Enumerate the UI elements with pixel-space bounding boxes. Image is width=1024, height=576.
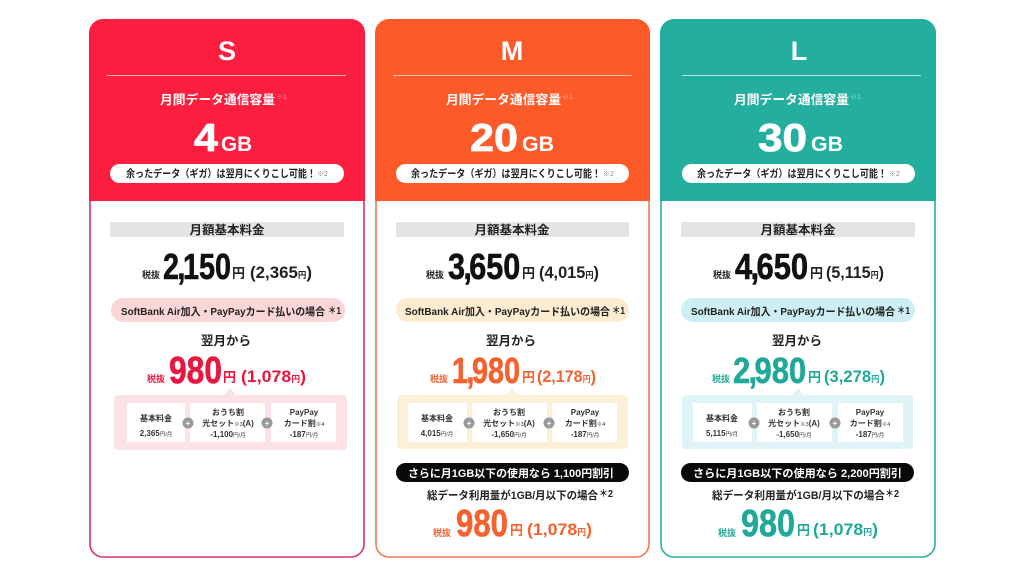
header: plan M: 20 xyxy=(470,117,518,160)
monthly fee: 税抜 xyxy=(142,269,160,280)
discount condition pill xyxy=(396,298,629,322)
price breakdown: + xyxy=(833,419,838,428)
price breakdown: -1,650円/月 xyxy=(776,430,812,439)
discounted price: 税抜 xyxy=(430,373,448,384)
header: plan M: M xyxy=(501,36,523,66)
monthly fee xyxy=(396,222,629,288)
header: plan L: 月間データ通信容量 xyxy=(734,92,849,107)
price breakdown: カード割※4 xyxy=(850,418,890,428)
monthly fee: (4,015円) xyxy=(539,263,599,282)
discount condition pill: SoftBank Air加入・PayPayカード払いの場合 xyxy=(691,305,895,318)
lowest price: 円 xyxy=(797,523,810,538)
price breakdown: 基本料金 xyxy=(706,413,738,423)
discount condition pill xyxy=(111,298,345,322)
price breakdown: -187円/月 xyxy=(571,430,599,439)
header: plan M: 月間データ通信容量 xyxy=(446,92,561,107)
price breakdown: + xyxy=(752,419,757,428)
price breakdown: 光セット※3(A) xyxy=(202,418,254,428)
discounted price: 税抜 xyxy=(712,373,730,384)
discount condition pill: ＊1 xyxy=(612,306,625,317)
monthly fee: 円 xyxy=(522,266,535,281)
discount condition pill: ＊1 xyxy=(897,306,910,317)
header: plan L: L xyxy=(791,36,807,66)
lowest price: 税抜 xyxy=(718,527,736,538)
monthly fee: (5,115円) xyxy=(826,263,884,282)
price breakdown: おうち割 xyxy=(212,407,244,417)
lowest price: 円 xyxy=(510,523,523,538)
price breakdown: おうち割 xyxy=(493,407,525,417)
header: plan L: 30 xyxy=(758,117,807,160)
header: plan M: ※2 xyxy=(603,170,614,178)
price breakdown: -1,650円/月 xyxy=(491,430,527,439)
extra discount banner: ＊2 xyxy=(885,489,899,500)
price breakdown: 基本料金 xyxy=(421,413,453,423)
lowest price: 980 xyxy=(456,503,508,545)
header: plan L xyxy=(660,19,936,201)
discounted price: (3,278円) xyxy=(824,367,885,386)
monthly fee: 月額基本料金 xyxy=(474,222,550,237)
header: plan L: 余ったデータ（ギガ）は翌月にくりこし可能！ xyxy=(697,167,887,180)
discounted price xyxy=(147,334,306,392)
monthly fee: 3,650 xyxy=(448,248,520,288)
monthly fee: (2,365円) xyxy=(250,263,312,282)
price breakdown: PayPay xyxy=(571,408,600,417)
price breakdown: カード割※4 xyxy=(565,418,605,428)
price breakdown: カード割※4 xyxy=(284,418,324,428)
monthly fee: 税抜 xyxy=(426,269,444,280)
monthly fee: 円 xyxy=(810,266,823,281)
discounted price: 1,980 xyxy=(452,350,520,391)
header: plan L: GB xyxy=(811,133,843,156)
header: plan L: ※1 xyxy=(850,93,861,101)
extra discount banner: ＊2 xyxy=(599,489,613,500)
header: plan S: ※2 xyxy=(317,170,328,178)
price breakdown: -187円/月 xyxy=(290,430,318,439)
discounted price xyxy=(430,334,596,391)
panel: plan L xyxy=(660,19,936,557)
header: plan S: 余ったデータ（ギガ）は翌月にくりこし可能！ xyxy=(126,167,316,180)
header: plan M xyxy=(375,19,650,201)
header: plan L: ※2 xyxy=(889,170,900,178)
header: plan S: 月間データ通信容量 xyxy=(160,92,275,107)
lowest price xyxy=(718,503,878,545)
discounted price: (2,178円) xyxy=(537,367,596,386)
extra discount banner xyxy=(396,463,629,502)
price breakdown: 光セット※3(A) xyxy=(483,418,535,428)
header: plan S: 4 xyxy=(194,117,218,160)
price breakdown xyxy=(114,388,347,450)
price breakdown: + xyxy=(547,419,552,428)
discount condition pill xyxy=(681,298,915,322)
price breakdown: -187円/月 xyxy=(856,430,884,439)
discounted price: 円 xyxy=(223,370,236,385)
discounted price: 円 xyxy=(808,370,821,385)
monthly fee: 月額基本料金 xyxy=(190,222,264,237)
price breakdown: + xyxy=(186,419,191,428)
lowest price: (1,078円) xyxy=(527,520,592,539)
price breakdown: 4,015円/月 xyxy=(421,429,453,438)
discount condition pill: SoftBank Air加入・PayPayカード払いの場合 xyxy=(121,305,325,318)
price breakdown: 基本料金 xyxy=(140,413,172,423)
discounted price: 翌月から xyxy=(201,334,251,348)
discounted price: 円 xyxy=(522,370,535,385)
price breakdown: 光セット※3(A) xyxy=(768,418,820,428)
price breakdown: 5,115円/月 xyxy=(706,429,738,438)
header: plan S: S xyxy=(218,36,236,66)
discounted price: 税抜 xyxy=(147,373,165,384)
lowest price: 980 xyxy=(741,503,795,545)
price breakdown: PayPay xyxy=(290,408,319,417)
extra discount banner: さらに月1GB以下の使用なら 2,200円割引 xyxy=(693,466,902,480)
monthly fee: 円 xyxy=(232,266,245,281)
discount condition pill: ＊1 xyxy=(328,306,341,317)
header: plan M: 余ったデータ（ギガ）は翌月にくりこし可能！ xyxy=(411,167,601,180)
monthly fee: 月額基本料金 xyxy=(760,222,836,237)
extra discount banner: 総データ利用量が1GB/月以下の場合 xyxy=(712,488,885,502)
monthly fee: 4,650 xyxy=(735,248,808,288)
monthly fee xyxy=(110,222,344,287)
monthly fee: 2,150 xyxy=(163,246,231,287)
discounted price: 2,980 xyxy=(733,352,806,392)
price breakdown: -1,100円/月 xyxy=(210,430,246,439)
extra discount banner: さらに月1GB以下の使用なら 1,100円割引 xyxy=(408,466,614,480)
monthly fee xyxy=(681,222,915,288)
price breakdown: おうち割 xyxy=(778,407,810,417)
header: plan S: GB xyxy=(221,133,252,156)
header: plan M: ※1 xyxy=(562,93,573,101)
discounted price: 980 xyxy=(169,350,222,392)
discounted price xyxy=(712,334,885,392)
header: plan M: GB xyxy=(522,133,554,156)
panel: plan S xyxy=(89,19,365,557)
price breakdown xyxy=(682,388,913,449)
header: plan S: ※1 xyxy=(276,93,287,101)
panel: plan M xyxy=(375,19,650,557)
price breakdown: + xyxy=(265,419,270,428)
extra discount banner xyxy=(681,463,914,502)
discounted price: 翌月から xyxy=(772,334,822,348)
lowest price: 税抜 xyxy=(433,527,451,538)
lowest price xyxy=(433,503,592,545)
price breakdown: PayPay xyxy=(856,408,885,417)
price breakdown: 2,365円/月 xyxy=(140,429,172,438)
discounted price: 翌月から xyxy=(486,334,536,348)
discounted price: (1,078円) xyxy=(241,367,306,386)
extra discount banner: 総データ利用量が1GB/月以下の場合 xyxy=(427,488,598,502)
discount condition pill: SoftBank Air加入・PayPayカード払いの場合 xyxy=(405,305,610,318)
lowest price: (1,078円) xyxy=(813,520,878,539)
monthly fee: 税抜 xyxy=(713,269,731,280)
price breakdown: + xyxy=(467,419,472,428)
header: plan S xyxy=(89,19,365,201)
price breakdown xyxy=(397,388,628,449)
